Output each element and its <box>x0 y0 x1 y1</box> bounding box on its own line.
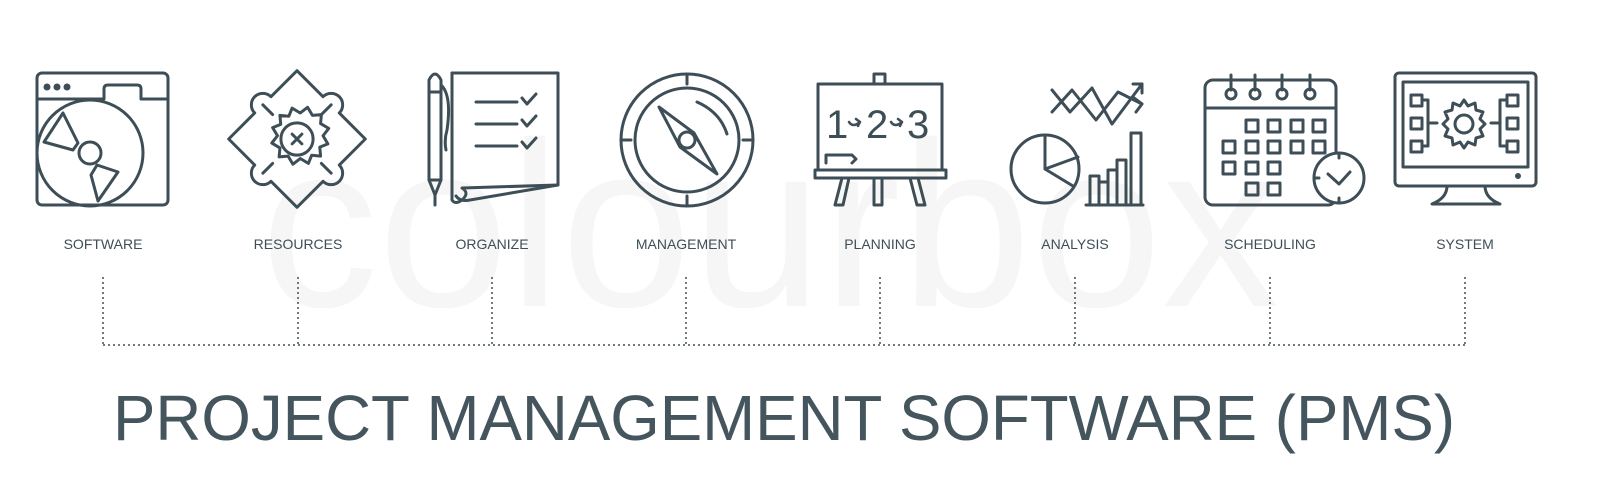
labels: SOFTWARE <box>64 236 142 252</box>
icon: management <box>621 74 753 206</box>
labels: RESOURCES <box>254 236 342 252</box>
labels: PLANNING <box>844 236 916 252</box>
labels: ANALYSIS <box>1041 236 1109 252</box>
connector lines <box>103 277 1465 345</box>
labels: SYSTEM <box>1436 236 1494 252</box>
labels <box>64 236 1494 252</box>
title: PROJECT MANAGEMENT SOFTWARE (PMS) <box>113 382 1455 454</box>
icon: scheduling <box>1205 75 1364 205</box>
icon: organize <box>429 73 558 205</box>
labels: SCHEDULING <box>1224 236 1316 252</box>
icon: resources <box>212 54 382 224</box>
icon: planning: 3 <box>907 103 929 147</box>
icon: software <box>37 73 168 206</box>
watermark: colourbox <box>261 93 1279 356</box>
icon: analysis <box>1011 84 1143 205</box>
icon: planning: 1 <box>826 103 848 147</box>
icon: system <box>1395 73 1536 204</box>
icon: planning: 2 <box>866 103 888 147</box>
labels: ORGANIZE <box>455 236 529 252</box>
labels: MANAGEMENT <box>636 236 737 252</box>
icon: planning <box>815 74 946 205</box>
